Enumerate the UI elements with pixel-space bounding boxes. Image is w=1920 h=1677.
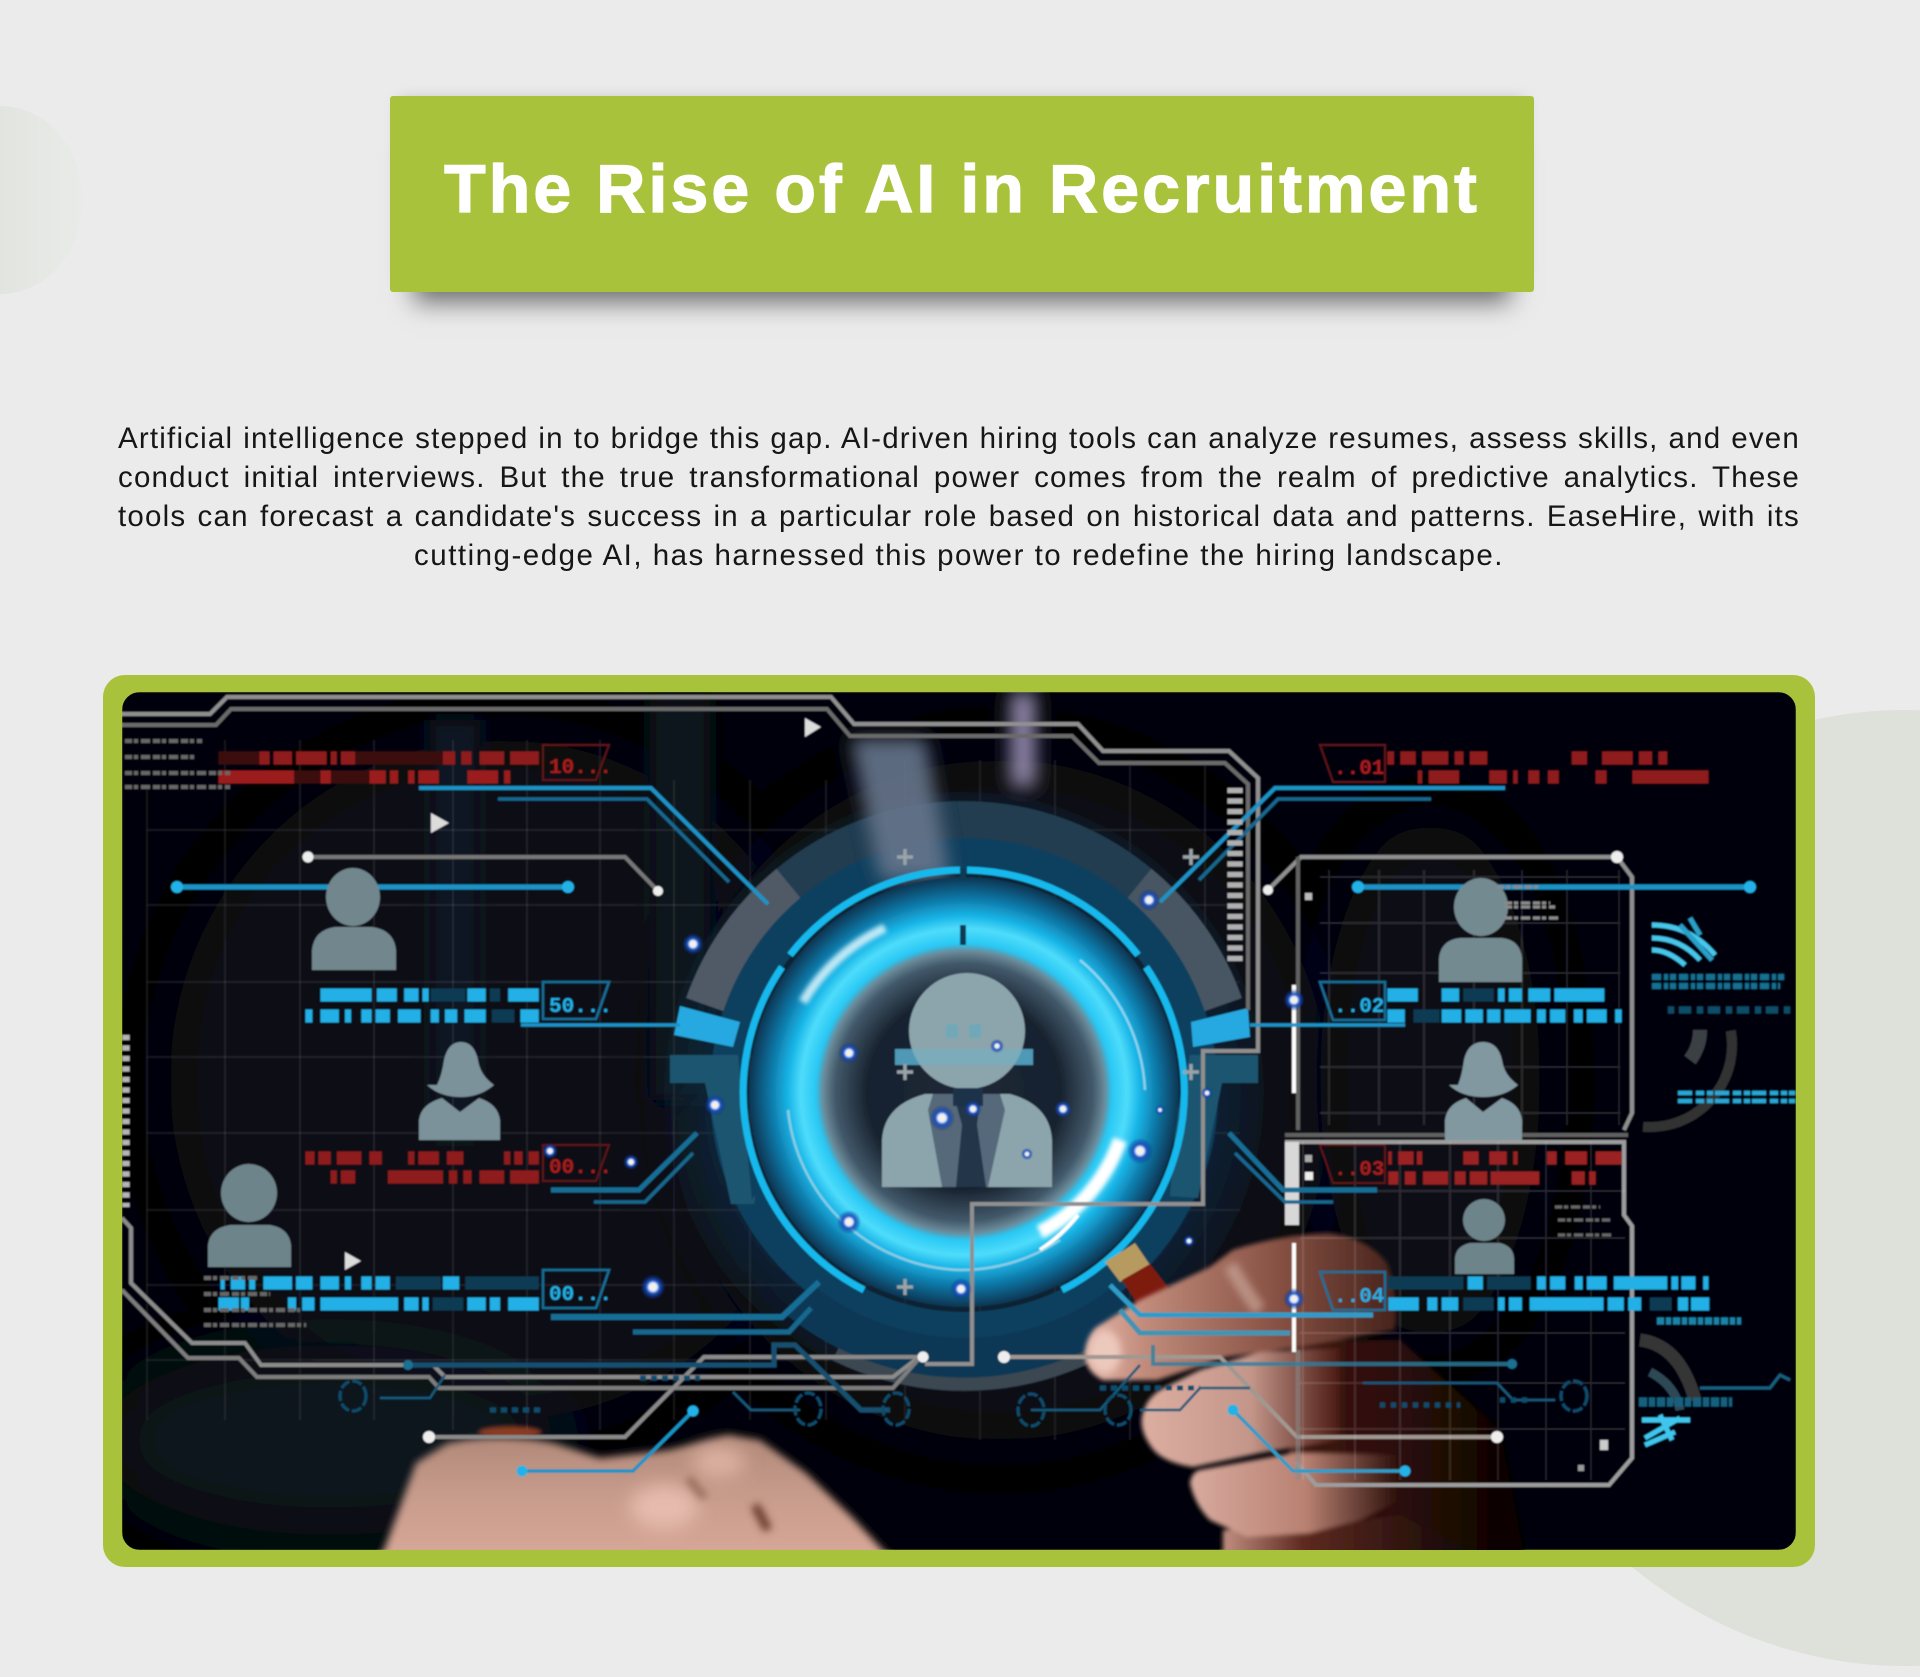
label tag: 10 — [543, 745, 612, 780]
label tag: 04 — [1320, 1272, 1385, 1310]
person icon 6 — [1455, 1199, 1514, 1274]
central candidate icon — [882, 973, 1052, 1187]
label tag: 00 blue — [543, 1270, 612, 1308]
HUD ring glyphs — [340, 1378, 1587, 1426]
person icon 3 — [208, 1164, 291, 1267]
decorative circle: left edge — [0, 106, 36, 294]
small grey readouts — [125, 741, 1612, 1325]
photo background: dark suit — [100, 692, 1796, 1550]
left hand — [376, 1426, 892, 1560]
decorative circle: bottom right — [1632, 710, 1920, 1666]
ticks: top center — [864, 706, 1036, 712]
glowing particles — [542, 889, 1305, 1310]
person icon 2 (female) — [419, 1042, 500, 1140]
label tag: 01 — [1320, 745, 1385, 782]
label tag: 50: 50... — [549, 996, 612, 1019]
right hand and magnifier handle — [1085, 1233, 1525, 1560]
intro paragraph: conduct initial interviews. But the true transformational power comes from the realm of predictive analytics. These — [118, 461, 1800, 494]
outer gear ring — [664, 792, 1264, 1392]
label tag: 00 blue: 00... — [549, 1284, 612, 1307]
intro paragraph: cutting-edge AI, has harnessed this power to redefine the hiring landscape. — [414, 539, 1504, 572]
play markers — [345, 718, 821, 1270]
gauge widget: upper right — [1555, 918, 1795, 1140]
circuit connector lines (blue) — [177, 788, 1750, 1471]
label tag: 02: ..02 — [1334, 996, 1384, 1019]
glowing lens ring — [743, 868, 1184, 1307]
person icon 1 — [312, 868, 396, 970]
intro paragraph: tools can forecast a candidate's success in a particular role based on historical data and patterns. EaseHire, with its — [118, 500, 1800, 533]
person icon 5 (female) — [1445, 1042, 1522, 1140]
intro paragraph — [118, 422, 1800, 572]
title banner — [390, 96, 1534, 292]
line end nodes: blue — [171, 881, 1756, 1476]
circuit frame lines (grey) — [122, 697, 1632, 1485]
intro paragraph: Artificial intelligence stepped in to bridge this gap. AI-driven hiring tools can analyze resumes, assess skills, and even — [118, 422, 1800, 455]
label tag: 00 red: 00... — [549, 1157, 612, 1180]
plus markers — [897, 849, 1199, 1295]
panel: framed AI recruitment illustration — [103, 675, 1815, 1567]
smoke streaks behind lens — [850, 692, 1036, 880]
label tag: 04: ..04 — [1334, 1286, 1384, 1309]
line end nodes: white — [302, 851, 1623, 1471]
ticks: vertical — [126, 788, 1235, 1207]
label tag: 10: 10... — [549, 757, 612, 780]
data bars: right column — [1387, 758, 1709, 1304]
label tag: 01: ..01 — [1334, 758, 1384, 781]
label tag: 02 — [1320, 982, 1385, 1020]
person icon 4 — [1439, 878, 1522, 982]
panel grids on the right — [1300, 870, 1625, 1480]
label tag: 03: ..03 — [1334, 1159, 1384, 1182]
label tag: 00 red — [543, 1145, 612, 1181]
data bars: left column — [219, 758, 539, 1304]
label tag: 03 — [1320, 1145, 1385, 1183]
side brackets and cyan tabs — [670, 1006, 1258, 1204]
grid lines — [147, 740, 1240, 1440]
label tag: 50 — [543, 982, 612, 1019]
gauge widget: lower right — [1639, 1321, 1790, 1445]
title: The Rise of AI in Recruitment — [444, 151, 1480, 227]
